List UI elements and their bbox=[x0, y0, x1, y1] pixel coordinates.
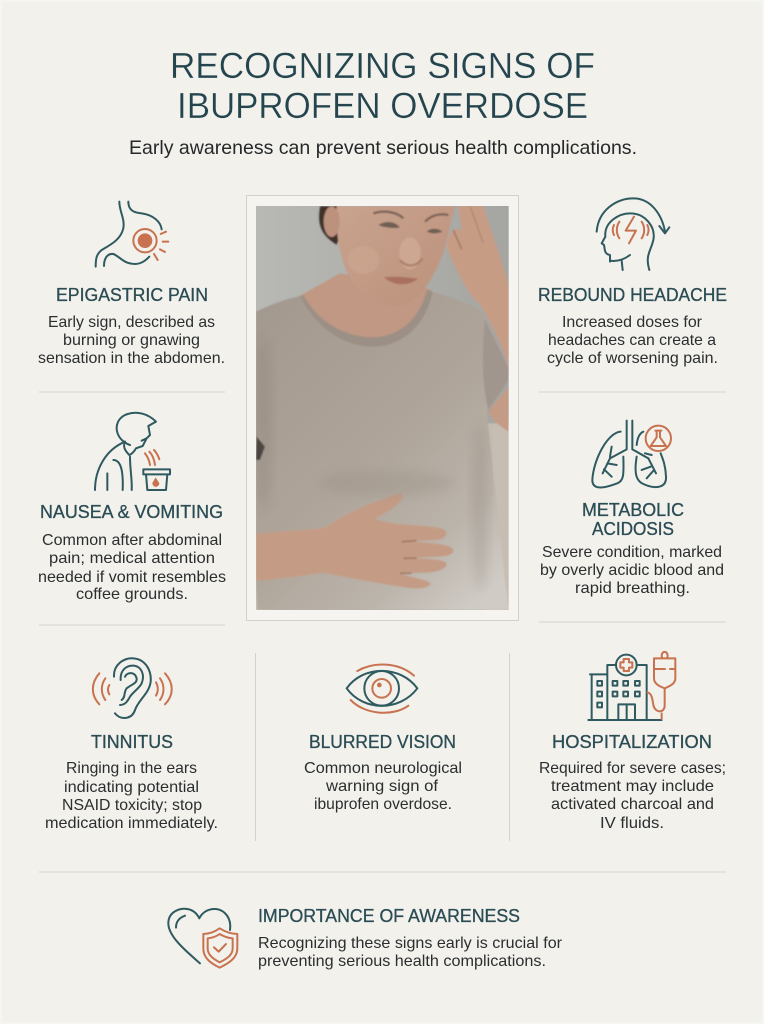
description: NSAID toxicity; stop bbox=[62, 797, 202, 814]
shirt bbox=[256, 292, 509, 610]
description: headaches can create a bbox=[548, 332, 716, 349]
panel: hospitalization bbox=[539, 652, 726, 832]
description: needed if vomit resembles bbox=[38, 569, 226, 586]
icon: head with lightning bolt and cycle arrow bbox=[597, 198, 669, 270]
description: ibuprofen overdose. bbox=[314, 796, 452, 813]
description: IV fluids. bbox=[600, 815, 664, 832]
subtitle: Early awareness can prevent serious health complications. bbox=[129, 137, 637, 159]
description bbox=[304, 760, 462, 813]
panel: epigastric pain bbox=[38, 202, 225, 367]
heading: EPIGASTRIC PAIN bbox=[56, 285, 208, 305]
description bbox=[547, 314, 718, 367]
panel: metabolic acidosis bbox=[540, 421, 724, 597]
icon: eye bbox=[347, 664, 417, 713]
icon: stomach bbox=[96, 202, 168, 267]
description: pain; medical attention bbox=[49, 550, 215, 567]
description: by overly acidic blood and bbox=[540, 562, 724, 579]
panel: blurred vision bbox=[304, 664, 462, 813]
heading: METABOLIC bbox=[582, 500, 684, 520]
heading: IMPORTANCE OF AWARENESS bbox=[258, 906, 520, 926]
heading: HOSPITALIZATION bbox=[552, 732, 712, 752]
description: Early sign, described as bbox=[48, 314, 215, 331]
description: sensation in the abdomen. bbox=[38, 350, 225, 367]
title: RECOGNIZING SIGNS OF bbox=[170, 45, 595, 86]
description: indicating potential bbox=[64, 779, 199, 796]
description: rapid breathing. bbox=[575, 580, 690, 597]
description bbox=[38, 532, 226, 603]
description bbox=[45, 760, 218, 832]
description: preventing serious health complications. bbox=[258, 953, 546, 970]
description: Severe condition, marked bbox=[542, 544, 722, 561]
icon: lungs with flask bbox=[592, 421, 671, 487]
description: Common neurological bbox=[304, 760, 462, 777]
description bbox=[38, 314, 225, 367]
heading: BLURRED VISION bbox=[309, 732, 456, 752]
description: Increased doses for bbox=[562, 314, 703, 331]
description: medication immediately. bbox=[45, 815, 218, 832]
right arm bbox=[488, 387, 509, 432]
heading: NAUSEA & VOMITING bbox=[40, 502, 223, 522]
face bbox=[336, 206, 455, 288]
description: cycle of worsening pain. bbox=[547, 350, 718, 367]
description bbox=[539, 760, 726, 832]
description: activated charcoal and bbox=[551, 796, 714, 813]
lower arm and hand bbox=[256, 493, 453, 588]
photo: woman holding head and stomach bbox=[246, 196, 518, 620]
title: IBUPROFEN OVERDOSE bbox=[177, 85, 588, 126]
panel: rebound headache bbox=[538, 198, 727, 367]
icon: ear with sound waves bbox=[93, 658, 172, 718]
shirt shading bbox=[472, 438, 488, 582]
description: Recognizing these signs early is crucial for bbox=[258, 935, 563, 952]
description bbox=[258, 935, 563, 970]
raised hand bbox=[447, 206, 509, 368]
description bbox=[540, 544, 724, 597]
description: warning sign of bbox=[325, 778, 439, 795]
panel: nausea and vomiting bbox=[38, 413, 226, 603]
hair bbox=[318, 206, 339, 246]
heading: ACIDOSIS bbox=[592, 519, 674, 539]
heading bbox=[582, 500, 684, 539]
description: Required for severe cases; bbox=[539, 760, 726, 777]
icon: heart with shield bbox=[168, 909, 237, 968]
description: Ringing in the ears bbox=[66, 760, 197, 777]
panel: tinnitus bbox=[45, 658, 218, 832]
title bbox=[170, 45, 595, 126]
icon: hospital and IV drip bbox=[588, 652, 675, 720]
heading: REBOUND HEADACHE bbox=[538, 285, 727, 305]
heading: TINNITUS bbox=[91, 732, 173, 752]
description: coffee grounds. bbox=[76, 586, 188, 603]
description: treatment may include bbox=[551, 778, 714, 795]
icon: person vomiting into bucket bbox=[95, 413, 170, 490]
neck and chest bbox=[298, 273, 432, 340]
description: Common after abdominal bbox=[42, 532, 222, 549]
panel: importance of awareness bbox=[168, 906, 563, 970]
description: burning or gnawing bbox=[63, 332, 200, 349]
